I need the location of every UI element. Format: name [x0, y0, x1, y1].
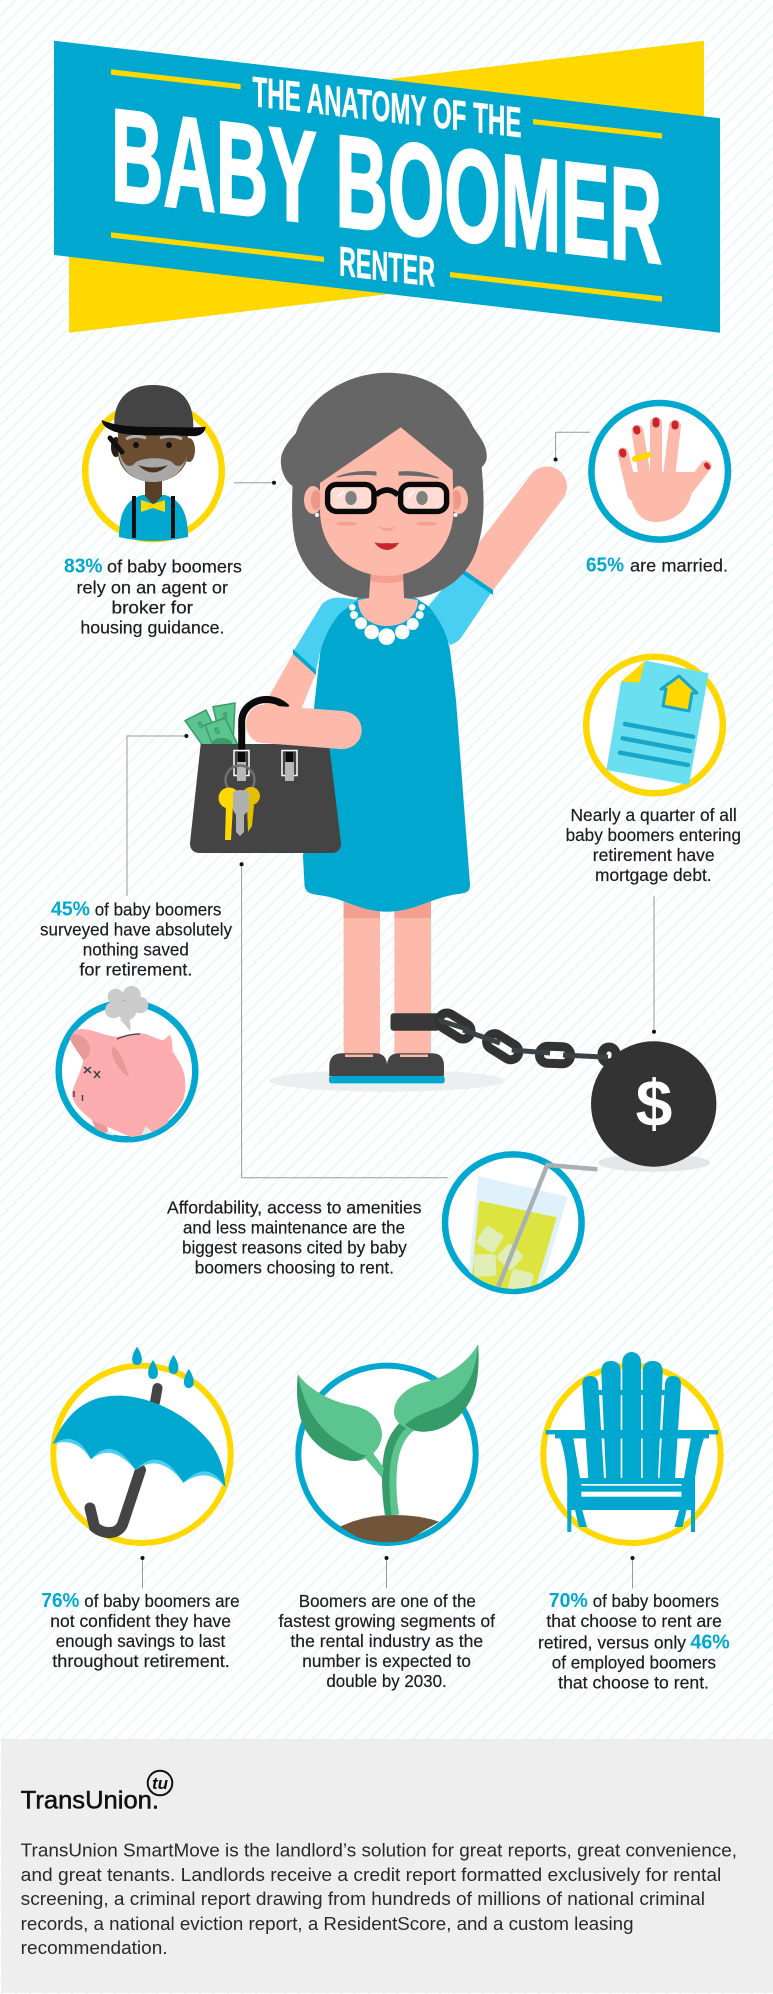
- text: 83% of baby boomers: 83%: [64, 556, 103, 578]
- text: affordability: biggest reasons cited by baby: [182, 1237, 407, 1257]
- text: 83% of baby boomers: of baby boomers: [107, 557, 242, 577]
- woman: lower-left arm: [258, 652, 316, 722]
- footer: description: screening, a criminal report drawing from hundreds of millions of national criminal: [21, 1888, 705, 1909]
- text: fastest growing segments: [279, 1591, 495, 1691]
- icon: piggy bank with smoke: [59, 986, 195, 1142]
- text: 76% not confident: [41, 1590, 240, 1671]
- text: 70% retired versus 46% employed: of employed boomers: [552, 1653, 716, 1673]
- text: 65% are married: 65%: [586, 555, 624, 577]
- text: affordability: boomers choosing to rent.: [195, 1257, 394, 1277]
- text: 70% retired versus 46% employed: [538, 1590, 730, 1693]
- woman: pearl necklace: [349, 604, 425, 645]
- bag: forearm: [246, 705, 362, 749]
- woman: left sleeve: [293, 598, 358, 675]
- text: 76% not confident: not confident they have: [50, 1611, 231, 1631]
- text: 83% of baby boomers: housing guidance.: [80, 617, 224, 637]
- text: nearly a quarter: baby boomers entering: [566, 825, 741, 845]
- text: 70% retired versus 46% employed: retired, versus only: [538, 1633, 686, 1653]
- text: 83% of baby boomers: broker for: [112, 597, 193, 617]
- text: 76% not confident: enough savings to last: [56, 1631, 225, 1651]
- icon: umbrella in rain: [53, 1347, 231, 1543]
- woman: right sleeve: [428, 567, 493, 645]
- woman: face: [320, 427, 454, 576]
- text: 70% retired versus 46% employed: 46%: [690, 1632, 730, 1654]
- text: 65% are married: are married.: [630, 556, 728, 576]
- text: 45% surveyed: 45%: [51, 899, 90, 921]
- text: affordability: and less maintenance are the: [183, 1217, 405, 1237]
- text: fastest growing segments: the rental industry as the: [290, 1631, 483, 1651]
- bag: buckles: [234, 750, 297, 781]
- text: 76% not confident: throughout retirement.: [52, 1651, 230, 1671]
- text: 45% surveyed: [40, 899, 232, 980]
- footer: TransUnion logo: tu: [152, 1774, 169, 1793]
- woman: shoes and cuff: [329, 1013, 445, 1083]
- text: 45% surveyed: surveyed have absolutely: [40, 920, 232, 940]
- bag: cash: [185, 703, 238, 748]
- connector: bag to drink text: [240, 862, 448, 1178]
- text: nearly a quarter: [566, 805, 741, 885]
- connector: cash to 45% text: [127, 734, 188, 896]
- text: nearly a quarter: retirement have: [593, 845, 715, 865]
- text: fastest growing segments: fastest growing segments of: [279, 1611, 495, 1631]
- ball and chain: [436, 1010, 716, 1172]
- text: 76% not confident: 76%: [41, 1590, 80, 1612]
- title banner: [54, 41, 720, 333]
- text: 70% retired versus 46% employed: that choose to rent.: [558, 1673, 709, 1693]
- woman: dress: [303, 598, 470, 912]
- woman: raised arm: [478, 486, 547, 577]
- text: fastest growing segments: double by 2030.: [326, 1671, 447, 1691]
- woman: legs: [344, 900, 431, 1058]
- icon: sprouting plant: [297, 1344, 479, 1545]
- woman: neck and chest: [358, 570, 418, 626]
- text: fastest growing segments: Boomers are one of the: [299, 1591, 476, 1611]
- text: 83% of baby boomers: rely on an agent or: [76, 577, 228, 597]
- bag: cash: $: [213, 725, 222, 738]
- text: nearly a quarter: mortgage debt.: [595, 865, 712, 885]
- text: affordability: Affordability, access to amenities: [167, 1197, 422, 1217]
- text: affordability: [167, 1197, 422, 1277]
- ball and chain: $: [636, 1066, 672, 1140]
- text: nearly a quarter: Nearly a quarter of all: [570, 805, 737, 825]
- illustration: baby boomer woman: [258, 373, 547, 1092]
- text: 45% surveyed: for retirement.: [79, 960, 192, 980]
- connector: mortgage text to ball: [652, 896, 656, 1034]
- connector: man to woman: [234, 481, 276, 485]
- icon: man with bowler hat: [85, 385, 222, 541]
- woman: hair: [281, 373, 487, 598]
- footer: description: and great tenants. Landlords receive a credit report formatted exclusively for rental: [21, 1864, 721, 1885]
- woman: cheeks, nose and lips: [336, 522, 436, 550]
- footer: description: records, a national eviction report, a ResidentScore, and a custom leasing: [21, 1913, 633, 1934]
- text: 45% surveyed: of baby boomers: [95, 900, 222, 920]
- footer: TransUnion logo: [21, 1771, 172, 1815]
- text: 65% are married: [586, 555, 728, 577]
- woman: glasses: [328, 484, 447, 511]
- icon: hand with wedding ring: [591, 403, 728, 540]
- icon: adirondack chair: [543, 1352, 721, 1543]
- text: 70% retired versus 46% employed: of baby boomers: [593, 1591, 719, 1611]
- text: fastest growing segments: number is expected to: [302, 1651, 471, 1671]
- connectors: bottom row: [140, 1556, 634, 1588]
- text: 70% retired versus 46% employed: that choose to rent are: [546, 1611, 722, 1631]
- woman: shadow: [269, 1070, 505, 1092]
- bag: handle: [242, 700, 287, 752]
- icon: mortgage document: [586, 657, 723, 793]
- footer: description: recommendation.: [21, 1937, 168, 1958]
- text: 83% of baby boomers: [64, 556, 242, 637]
- title line: the anatomy of the: THE ANATOMY OF THE: [252, 68, 522, 147]
- woman: eyebrows: [337, 472, 439, 478]
- footer: TransUnion logo: TransUnion.: [21, 1787, 159, 1815]
- bag: cash: $: [221, 711, 229, 723]
- text: 70% retired versus 46% employed: 70%: [549, 1590, 588, 1612]
- bag: keys: [218, 766, 260, 840]
- title line: renter: RENTER: [339, 237, 435, 295]
- bag: cash: $: [196, 719, 206, 732]
- text: 45% surveyed: nothing saved: [83, 940, 189, 960]
- panel: footer: [1, 1739, 773, 1993]
- icon: glass of lemonade with straw: [445, 1154, 597, 1295]
- footer: description: TransUnion SmartMove is the landlord’s solution for great reports, great convenience,: [21, 1840, 737, 1861]
- connector: hand to raised arm: [554, 432, 590, 462]
- footer: description: [21, 1840, 737, 1958]
- bag: body: [190, 744, 341, 853]
- text: 76% not confident: of baby boomers are: [84, 1591, 240, 1611]
- icon: handbag with keys and cash: [185, 700, 362, 853]
- woman: ears: [304, 486, 468, 517]
